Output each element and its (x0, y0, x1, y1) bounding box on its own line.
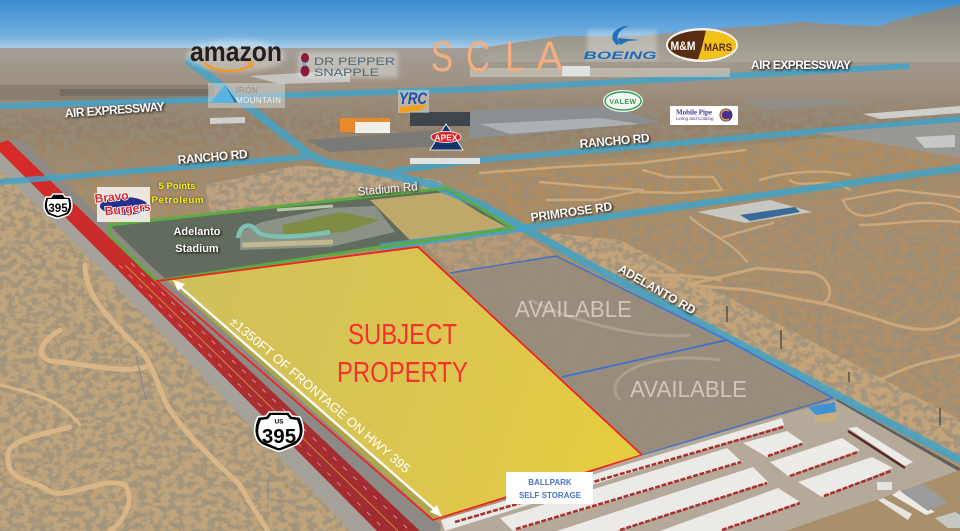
frontage label: ±1350FT OF FRONTAGE ON HWY 395 (227, 314, 413, 476)
us 395 shield large (255, 412, 303, 451)
desert trails (0, 150, 960, 531)
air expressway label east: AIR EXPRESSWAY (751, 58, 851, 72)
logo: yrc (398, 89, 429, 113)
available label lower: AVAILABLE (630, 376, 747, 402)
logo: m&m mars (666, 28, 738, 62)
logo: dr pepper snapple (298, 52, 398, 79)
logo: iron mountain (208, 83, 285, 108)
logo: apex (430, 124, 463, 150)
adelanto stadium label: Stadium (175, 243, 219, 255)
logo: m&m mars: MARS (704, 42, 732, 54)
far airport and industrial buildings (210, 66, 960, 223)
us 395 shield large: 395 (262, 425, 296, 448)
storage building g (848, 427, 913, 468)
ballpark self storage label (506, 472, 593, 504)
5 points petroleum label: Petroleum (152, 195, 204, 206)
self storage complex (441, 400, 960, 531)
logo: mobile pipe: Mobile Pipe (676, 108, 712, 116)
stadium practice field (370, 192, 510, 240)
subject olive frontage strip (160, 281, 441, 519)
storage building f (798, 457, 893, 497)
primrose road label: PRIMROSE RD (530, 199, 613, 225)
power poles (136, 306, 940, 500)
logo: iron mountain: IRON (236, 86, 258, 95)
adelanto stadium label (173, 226, 221, 255)
us 395 shield small (44, 194, 72, 218)
logo: iron mountain: MOUNTAIN (236, 96, 281, 105)
mountains (480, 5, 960, 62)
logo: scla: A (536, 33, 563, 81)
logo: bravo burgers: Bravo (94, 188, 129, 206)
rancho road label west: RANCHO RD (177, 147, 248, 167)
stadium road label: Stadium Rd (357, 181, 418, 199)
road: adelanto road (187, 60, 960, 460)
storage north long building (441, 418, 784, 531)
logo: dr pepper snapple: DR PEPPER (314, 56, 395, 68)
5 points petroleum label: 5 Points (159, 181, 195, 192)
logo: scla (431, 33, 563, 81)
storage building c (660, 488, 800, 531)
logo: scla: L (505, 33, 525, 81)
subject property label: PROPERTY (337, 357, 468, 389)
logo: m&m mars: M&M (670, 39, 696, 53)
storage office (808, 402, 836, 422)
frontage arrow (173, 280, 442, 517)
gray roof building (892, 484, 948, 515)
logo: scla: S (431, 33, 453, 81)
road: primrose road (380, 168, 960, 247)
us 395 shield large: US (274, 418, 284, 426)
logo: scla: C (466, 33, 490, 81)
stadium building (238, 206, 395, 250)
asphalt below adelanto road (835, 402, 960, 472)
sandy land patches (205, 125, 960, 460)
road: air expressway (0, 66, 910, 106)
highway 395 (0, 140, 440, 531)
storage building d (743, 431, 803, 457)
stadium boundary (110, 188, 513, 281)
logo: bravo burgers (94, 187, 152, 222)
5 points petroleum label (152, 181, 204, 206)
available parcel boundaries (450, 256, 833, 455)
storage building e (770, 438, 860, 476)
logo: dr pepper snapple: SNAPPLE (314, 67, 379, 79)
adelanto road label: ADELANTO RD (616, 262, 698, 318)
subject property label (337, 319, 468, 389)
logo: mobile pipe: Lining and Coating (676, 116, 714, 121)
rancho road label east: RANCHO RD (579, 131, 650, 151)
town (0, 85, 215, 100)
logo: amazon: amazon (190, 36, 282, 67)
small white buildings (877, 482, 960, 528)
logo: boeing (584, 26, 657, 62)
logo: mobile pipe (670, 106, 738, 125)
available parcels (452, 258, 831, 454)
stadium land (110, 188, 513, 281)
logo: valew: VALEW (609, 99, 637, 106)
subject fill (157, 247, 642, 520)
logo: valew (603, 90, 643, 112)
adelanto stadium label: Adelanto (173, 226, 221, 238)
dirt corner (785, 470, 960, 531)
road: rancho road (0, 119, 960, 182)
subject boundary (157, 247, 642, 520)
ballpark self storage label: SELF STORAGE (519, 491, 582, 500)
air expressway label west: AIR EXPRESSWAY (64, 100, 165, 120)
us 395 shield small: 395 (48, 203, 68, 215)
logo: yrc: YRC (399, 89, 428, 108)
logo: boeing: BOEING (584, 50, 657, 62)
sky (0, 0, 960, 52)
logo: bravo burgers: Burgers (104, 200, 152, 218)
subject property label: SUBJECT (348, 319, 457, 351)
available label upper: AVAILABLE (515, 296, 632, 322)
lower left desert (0, 152, 377, 531)
storage building b (557, 467, 768, 531)
ballpark self storage label: BALLPARK (528, 478, 572, 487)
storage building a (500, 448, 742, 531)
logo: apex: APEX (434, 132, 458, 142)
